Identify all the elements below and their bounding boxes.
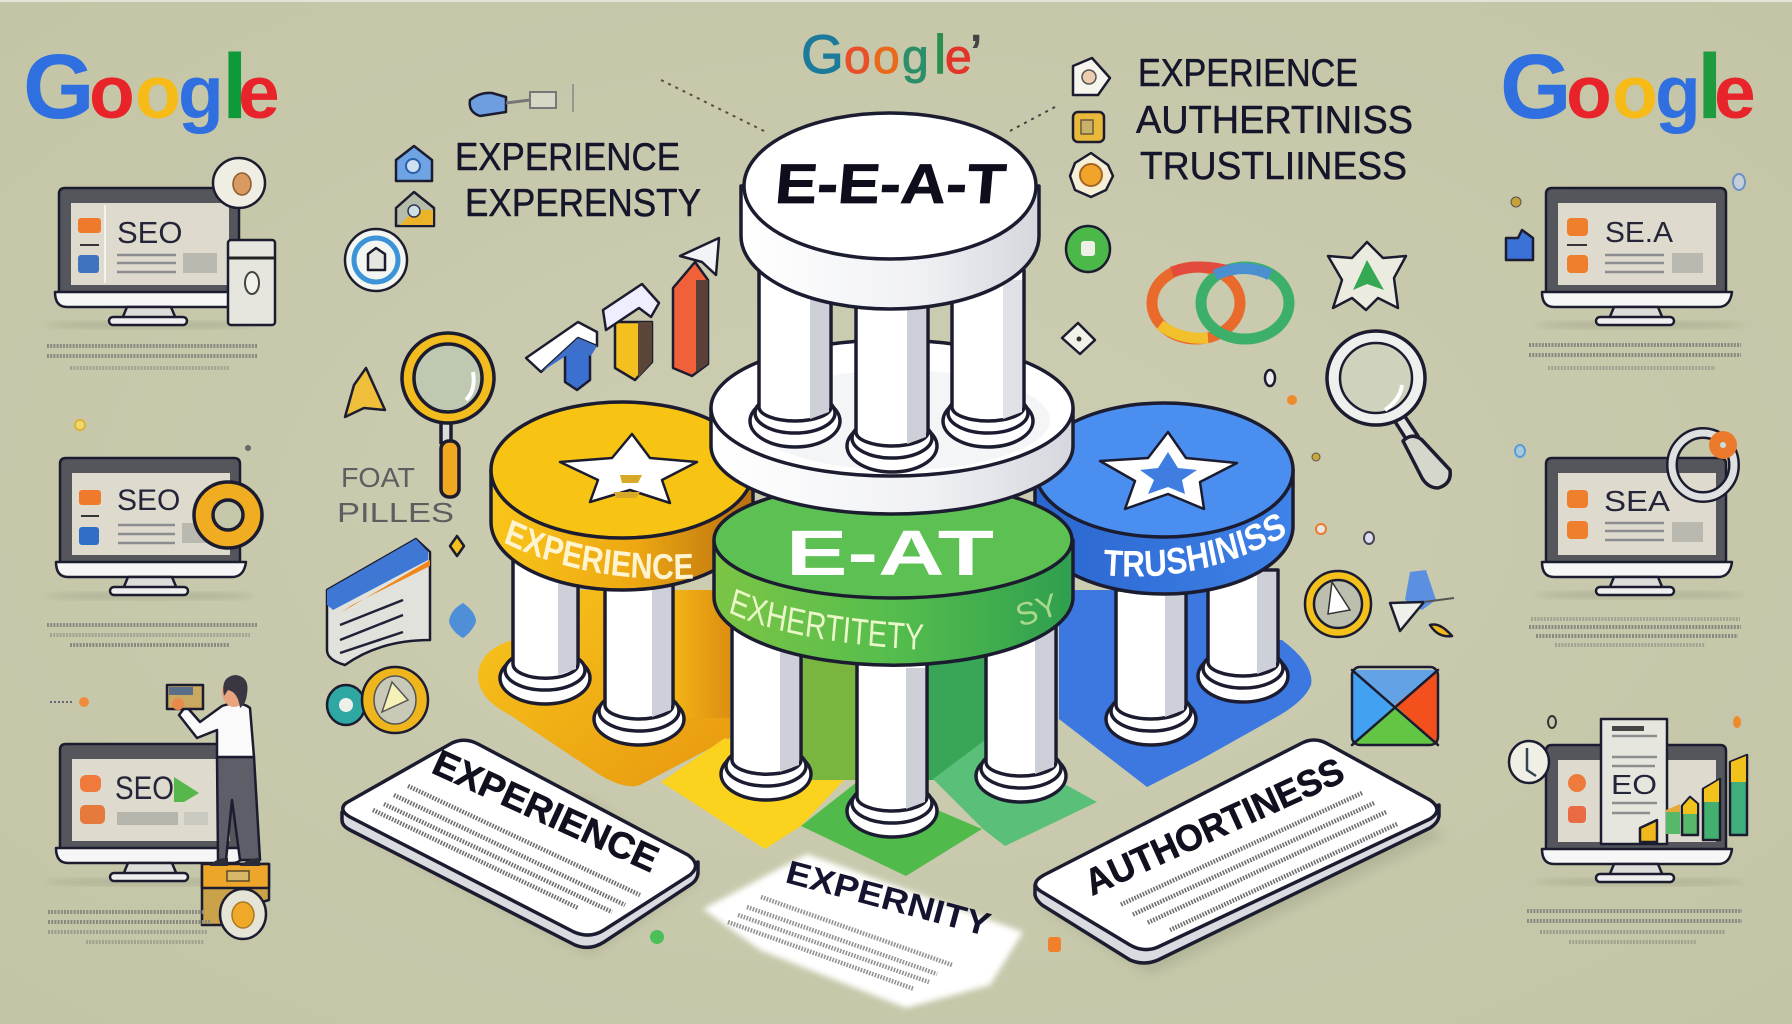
cylinder side: green <box>714 540 1073 665</box>
star: blue <box>1100 432 1237 509</box>
band label: exhertitety: EXHERTITETY <box>730 588 924 650</box>
icon: blue shield <box>396 146 432 181</box>
caption: right middle <box>1529 619 1741 645</box>
monitor: right bottom: EO <box>1611 769 1657 800</box>
icon: clock badge <box>1509 741 1549 783</box>
label: authertiniss: AUTHERTINISS <box>1136 99 1413 142</box>
column: upper right <box>943 270 1033 447</box>
pillar group: green <box>712 496 1075 839</box>
heading: EXPERNITY <box>782 853 995 943</box>
monitor: right middle: SEA <box>1604 486 1671 518</box>
logo: Google left: G <box>23 36 95 138</box>
icon: white magnifier <box>1327 331 1450 488</box>
star core <box>1140 452 1197 494</box>
label: foat pillars <box>337 462 454 528</box>
pillar group: blue <box>1033 401 1295 747</box>
plate: blue <box>1059 590 1311 787</box>
caption: left top <box>47 346 258 368</box>
logo: Google left: o <box>89 50 135 134</box>
arrow: blue <box>526 322 597 390</box>
icon: bird shape <box>1390 570 1454 636</box>
person on box <box>167 675 269 939</box>
logo: Google right: G <box>1500 36 1572 138</box>
monitor: right bottom <box>1509 719 1747 886</box>
logo: Google right: l <box>1697 36 1723 138</box>
star mark <box>614 475 642 498</box>
icon: orange badge <box>1070 153 1113 197</box>
card: experience <box>342 740 700 955</box>
icon: yellow square <box>1073 112 1104 142</box>
icon: yellow ring right <box>1305 571 1371 637</box>
icon: camera dot <box>213 158 265 208</box>
monitor: left top: SEO <box>117 215 182 250</box>
cylinder side: blue <box>1035 470 1293 594</box>
column: blue right <box>1198 570 1288 702</box>
icon: star badge <box>1328 242 1406 310</box>
monitor: left middle <box>45 458 262 600</box>
star: yellow <box>560 434 697 503</box>
caption: right top <box>1529 345 1741 368</box>
column: yellow right <box>594 580 684 745</box>
monitor: left top <box>45 158 275 329</box>
column: blue left <box>1106 590 1196 745</box>
column: green left <box>721 625 811 800</box>
plate: green middle <box>801 778 982 876</box>
heading: EXPERIENCE <box>427 742 665 880</box>
logo: Google center: e <box>945 31 972 84</box>
band label: trushiniss: TRUSHINISS <box>1104 514 1285 576</box>
label: foat pillars: FOAT <box>341 462 415 493</box>
shoes <box>210 858 260 866</box>
small decorative marks <box>50 174 1745 952</box>
icon: diamond <box>1062 323 1095 354</box>
logo: Google center: G <box>801 23 844 85</box>
plate: green right <box>933 740 1097 846</box>
dotted connector left <box>661 80 766 132</box>
label: experience: EXPERIENCE <box>455 136 680 179</box>
icon: browser card <box>327 539 430 665</box>
logo: Google center: o <box>844 31 871 84</box>
logo: Google left: g <box>178 50 224 134</box>
card: experiency <box>703 853 1023 1008</box>
logo: Google right: g <box>1655 50 1701 134</box>
plate: yellow wall <box>673 590 730 718</box>
plate: yellow lower <box>661 738 845 849</box>
left top labels <box>455 136 701 225</box>
icon: yellow magnifier <box>402 333 494 497</box>
cylinder top: yellow <box>491 402 753 538</box>
logo: Google right: o <box>1612 50 1658 134</box>
logo: Google left: l <box>222 36 248 138</box>
cylinder side: yellow <box>491 470 753 590</box>
logo: Google left: e <box>238 50 280 134</box>
caption: left middle <box>47 625 258 645</box>
bar chart <box>1640 755 1747 842</box>
monitor: left middle: SEO <box>117 484 180 517</box>
icon: coins <box>327 667 428 733</box>
coin <box>220 889 266 939</box>
heading: AUTHORTINESS <box>1078 750 1350 903</box>
icon: pentagon <box>1073 58 1110 95</box>
label: experience right: EXPERIENCE <box>1138 52 1358 95</box>
icon: interlocking rings <box>1152 267 1289 339</box>
logo: Google left: o <box>135 50 181 134</box>
column: upper middle <box>847 300 937 472</box>
logo: Google right: o <box>1566 50 1612 134</box>
body lines <box>1120 793 1397 930</box>
card: authoritiness <box>1035 740 1445 975</box>
icon: blue tag <box>1506 230 1533 260</box>
document <box>1601 719 1667 844</box>
head <box>222 675 248 708</box>
lower white disc <box>711 340 1073 514</box>
cylinder top: green <box>714 482 1072 598</box>
caption: left bottom <box>48 912 210 942</box>
column: green right <box>976 620 1066 802</box>
logo: Google center: o <box>873 31 900 84</box>
label: experensty: EXPERENSTY <box>465 182 701 225</box>
plate: green wall left <box>800 650 860 780</box>
monitor: left bottom <box>45 744 255 886</box>
icon: silver ring <box>1672 431 1737 497</box>
icon: green circle <box>1066 226 1110 272</box>
arrow: yellow <box>603 284 659 380</box>
cylinder top: blue <box>1035 403 1293 537</box>
icon: gold ring <box>194 482 262 548</box>
box <box>202 864 269 925</box>
icon: blue ring circle <box>345 229 407 291</box>
label: trustliiness: TRUSTLIINESS <box>1140 145 1407 188</box>
card in hand <box>167 685 203 710</box>
arrow: red <box>673 238 719 376</box>
caption: right bottom <box>1527 911 1742 942</box>
monitor: left bottom: SEO <box>115 770 174 806</box>
icon: small yellow arrow <box>345 368 385 417</box>
column: yellow left <box>500 560 590 704</box>
right top labels <box>1136 52 1413 188</box>
logo: Google center: ’ <box>970 23 982 85</box>
icon: connector top-left <box>470 84 573 116</box>
logo: Google center: l <box>934 23 946 85</box>
shirt <box>179 703 254 757</box>
band label: experience: EXPERIENCE <box>504 520 693 580</box>
dotted connector right <box>1008 107 1055 132</box>
label: foat pillars: PILLES <box>337 497 454 528</box>
plate: green wall right <box>927 650 987 780</box>
icon: x-square <box>1352 667 1438 745</box>
body lines <box>728 897 952 989</box>
monitor: right top <box>1506 188 1745 329</box>
chart: growth arrows <box>526 238 719 390</box>
pillar group: yellow <box>489 400 755 747</box>
plate: yellow upper <box>478 590 730 786</box>
logo: Google right: e <box>1714 50 1756 134</box>
title: e-e-a-t: E-E-A-T <box>773 152 1008 215</box>
pants <box>217 757 260 860</box>
body lines <box>373 786 640 912</box>
icon: phone <box>228 240 275 325</box>
monitor: right middle <box>1535 431 1745 599</box>
band label: sy: SY <box>1011 586 1063 634</box>
column: green middle <box>847 660 937 837</box>
label: e-at: E-AT <box>786 517 994 589</box>
icon: yellow shield <box>396 192 434 226</box>
column: upper left <box>750 270 840 447</box>
top cap <box>741 113 1039 309</box>
logo: Google center: g <box>902 31 929 84</box>
monitor: right top: SE.A <box>1605 217 1674 249</box>
